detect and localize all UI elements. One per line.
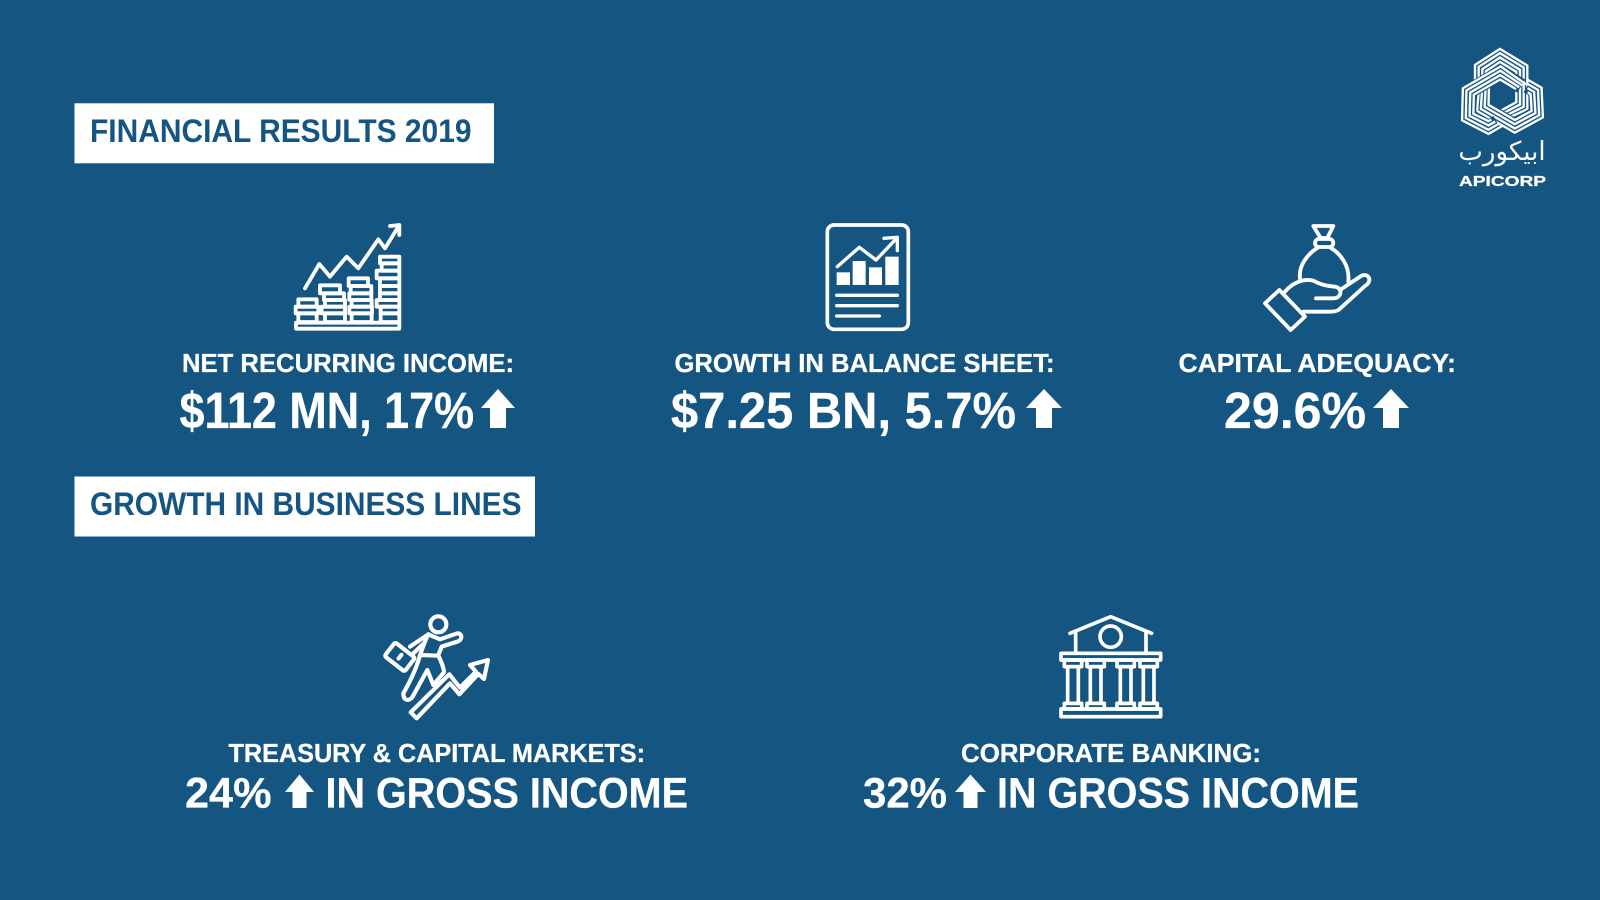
value: corporate banking gross income: 32% xyxy=(863,770,947,817)
label: net recurring income: NET RECURRING INCOME: xyxy=(182,348,514,378)
logo: APICORP: ابيكورب xyxy=(1458,137,1546,167)
label: growth in balance sheet: GROWTH IN BALANCE SHEET: xyxy=(674,348,1054,378)
heading: growth in business lines: GROWTH IN BUSINESS LINES xyxy=(90,486,522,522)
value: growth in balance sheet: $7.25 BN, 5.7% xyxy=(671,382,1016,439)
icon: hand holding money bag xyxy=(1265,226,1369,330)
heading: growth in business lines xyxy=(74,476,535,536)
value: treasury gross income: IN GROSS INCOME xyxy=(326,770,688,817)
heading: financial results 2019 xyxy=(74,103,494,163)
icon: businessman climbing arrow xyxy=(384,616,488,718)
value: treasury gross income: 24% xyxy=(185,770,272,817)
heading: financial results 2019: FINANCIAL RESULTS 2019 xyxy=(90,113,472,149)
value: net recurring income: $112 MN, 17% xyxy=(180,382,474,439)
value: treasury gross income xyxy=(185,770,688,817)
value: capital adequacy: 29.6% xyxy=(1224,382,1366,439)
icon: bank building xyxy=(1061,617,1161,717)
icon: report with chart xyxy=(827,225,908,329)
logo: APICORP xyxy=(1448,49,1555,190)
label: treasury and capital markets: TREASURY & CAPITAL MARKETS: xyxy=(228,738,645,768)
value: corporate banking gross income: IN GROSS INCOME xyxy=(997,770,1359,817)
label: corporate banking: CORPORATE BANKING: xyxy=(961,738,1261,768)
icon: coin stacks with rising trend xyxy=(296,225,399,329)
value: corporate banking gross income xyxy=(863,770,1359,817)
logo: APICORP: APICORP xyxy=(1459,173,1546,190)
label: capital adequacy: CAPITAL ADEQUACY: xyxy=(1178,348,1456,378)
